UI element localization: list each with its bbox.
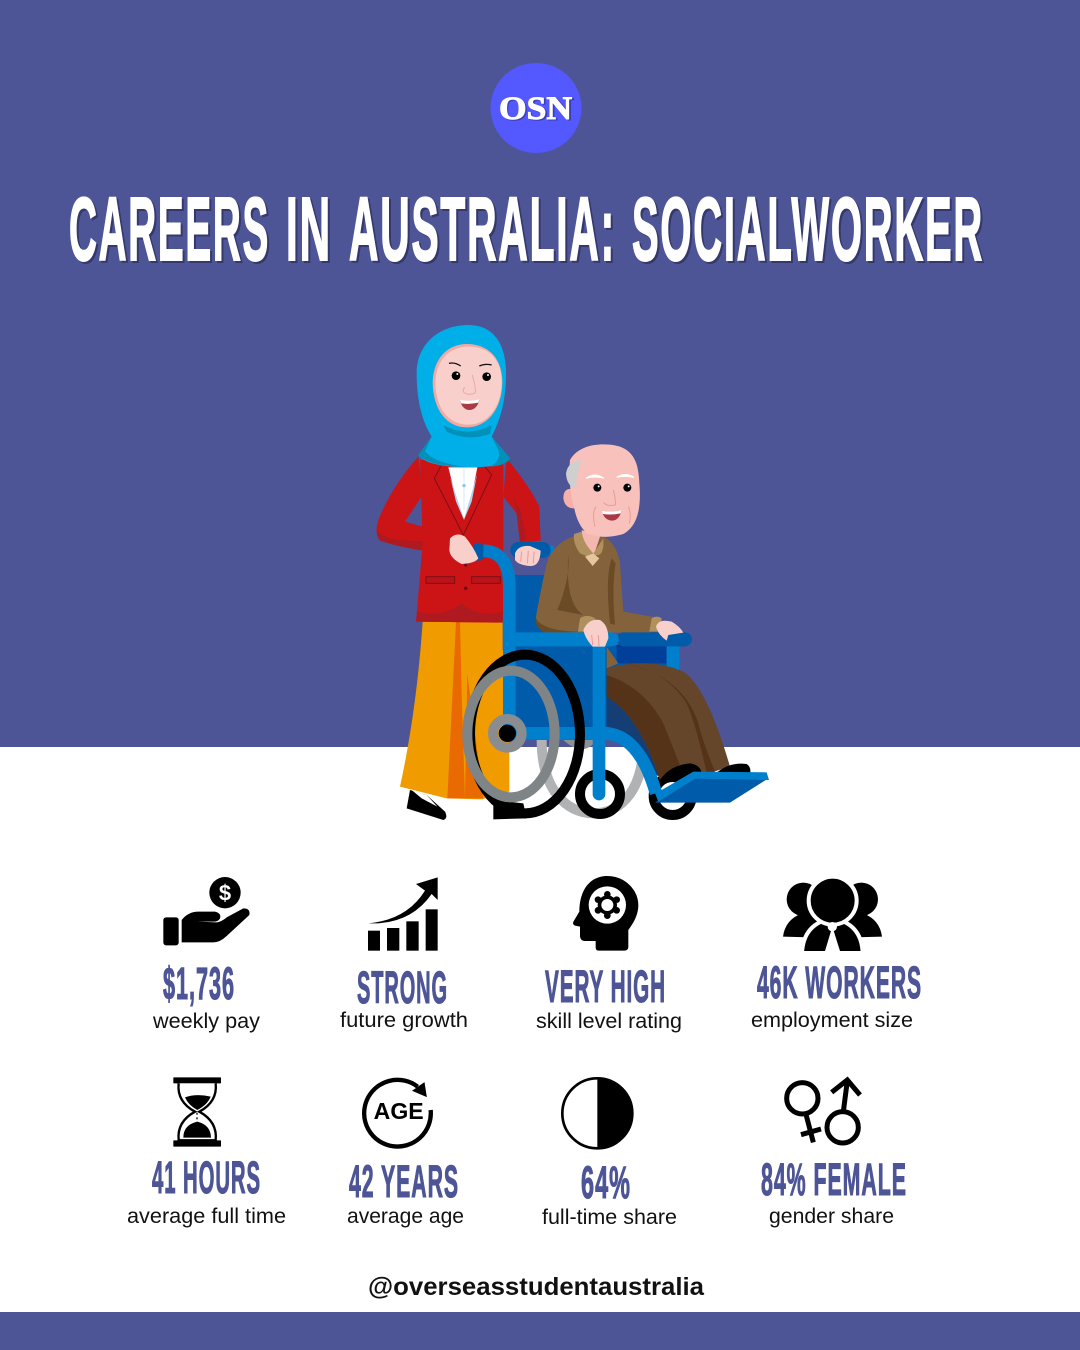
stat: future growth: STRONG (357, 962, 448, 1013)
stat: future growth: future growth (340, 1009, 468, 1032)
background: purple upper panel (0, 0, 1080, 747)
text: 84% FEMALE (761, 1154, 907, 1205)
elderly man figure (536, 444, 662, 633)
icon: half circle (562, 1077, 633, 1149)
wheelchair: left front wheel (580, 774, 620, 814)
wheelchair: handle stub (542, 537, 554, 563)
stat: hours (127, 1152, 286, 1228)
man's trousers (607, 647, 750, 780)
wheelchair: frame (478, 548, 685, 793)
wheelchair: footrest (655, 772, 769, 803)
wheelchair: right front wheel (654, 777, 692, 815)
stat: hours: 41 HOURS (152, 1152, 261, 1203)
stat: weekly pay (152, 958, 261, 1033)
stat: employment size: employment size (751, 1009, 913, 1032)
wheelchair: seat (515, 575, 679, 752)
title: AUSTRALIA: (349, 180, 616, 280)
woman figure (377, 325, 541, 820)
icon: hourglass (173, 1077, 221, 1147)
stat: full-time share: full-time share (542, 1206, 677, 1229)
title: CAREERS (71, 182, 272, 282)
stat: hours: average full time (127, 1205, 286, 1228)
title: IN (288, 182, 334, 282)
icon: hand with coin: $ (219, 881, 231, 906)
logo: OSN badge (490, 63, 582, 153)
stat: future growth (340, 962, 468, 1032)
background: purple footer bar (0, 1312, 1080, 1350)
title: CAREERS (69, 180, 270, 280)
text: 42 YEARS (349, 1156, 459, 1207)
title (69, 180, 986, 282)
stat: gender share (761, 1154, 907, 1228)
stat: skill level: skill level rating (536, 1010, 682, 1033)
stat: full-time share: 64% (581, 1157, 631, 1208)
icon: gender symbols (787, 1080, 860, 1143)
stat: age (347, 1156, 464, 1228)
wheelchair: large wheel (467, 655, 580, 813)
stat: weekly pay: $1,736 (163, 958, 235, 1009)
wheelchair: rear grey wheel (542, 740, 643, 813)
illustration: social worker pushing elderly man in wheelchair (377, 325, 769, 820)
stat: full-time share (542, 1157, 677, 1229)
logo: OSN badge: OSN (499, 91, 572, 127)
stat: weekly pay: weekly pay (152, 1010, 261, 1033)
wheelchair: vertical strut (580, 647, 618, 794)
icon: age cycle: AGE (374, 1098, 424, 1124)
icon: hand with coin (163, 877, 250, 945)
stat: employment size (751, 957, 922, 1032)
hands (449, 535, 683, 647)
title: AUSTRALIA: (351, 182, 618, 282)
icon: age cycle (364, 1080, 431, 1147)
stat: skill level: VERY HIGH (545, 961, 666, 1012)
stat: age: average age (347, 1205, 464, 1228)
icon: head with gear (573, 876, 638, 951)
logo: OSN badge: OSN (500, 92, 574, 128)
stat: skill level (536, 961, 682, 1033)
icon: growth chart (368, 877, 438, 951)
social handle: @overseasstudentaustralia (368, 1273, 705, 1301)
icon: group of people (783, 877, 882, 956)
title: IN (286, 180, 332, 280)
stat: gender share: gender share (769, 1205, 894, 1228)
